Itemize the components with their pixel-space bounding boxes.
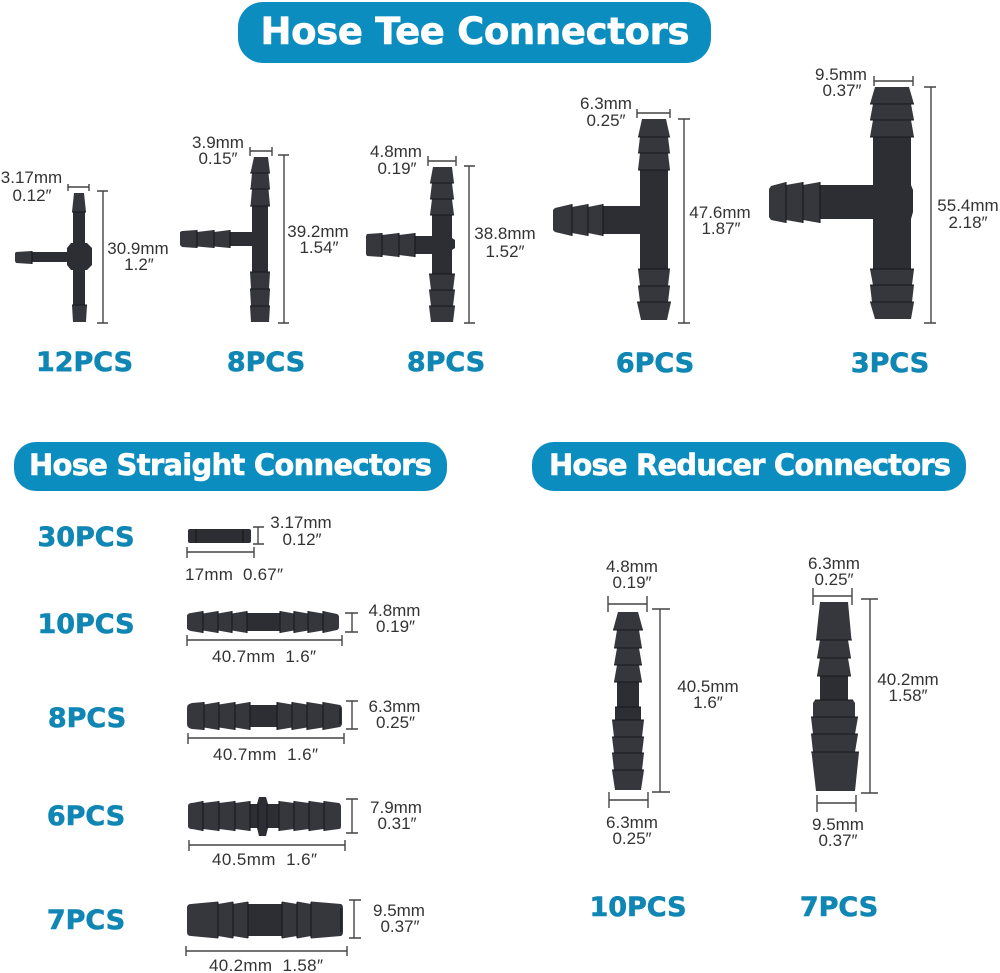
- quantity: 3PCS: [851, 348, 929, 379]
- dimensions: 0.25″: [586, 111, 626, 130]
- icon: 4.8mm straight: [187, 611, 339, 633]
- dimensions: 40.7mm 1.6″: [212, 647, 316, 666]
- dimensions: [187, 601, 420, 666]
- dimensions: 0.25″: [612, 829, 652, 848]
- dimensions: 0.37″: [380, 917, 420, 936]
- panel: 7PCS reducer connector: [800, 554, 939, 923]
- dimensions: 0.31″: [377, 814, 417, 833]
- icon: 3.17mm straight: [188, 529, 251, 543]
- dimensions: 1.6″: [693, 693, 723, 712]
- heading: Hose Straight Connectors: Hose Straight Connectors: [29, 448, 432, 482]
- dimensions: 0.19″: [376, 617, 415, 636]
- panel: 6PCS straight connector: [47, 797, 422, 869]
- icon: 9.5mm tee: [769, 87, 914, 319]
- panel: 8PCS tee connector 3.9mm: [180, 133, 349, 378]
- quantity: 8PCS: [227, 347, 305, 378]
- dimensions: 0.37″: [822, 81, 862, 100]
- dimensions: 6.3mm: [369, 697, 420, 716]
- dimensions: 17mm 0.67″: [185, 565, 283, 584]
- dimensions: 1.54″: [299, 238, 339, 257]
- dimensions: 30.9mm: [107, 239, 169, 258]
- panel: 12PCS tee connector: [1, 168, 169, 378]
- icon: 7.9mm straight: [188, 797, 341, 836]
- quantity: 7PCS: [800, 892, 878, 923]
- panel: 10PCS reducer connector: [589, 557, 739, 923]
- dimensions: [370, 142, 536, 323]
- dimensions: [189, 798, 422, 869]
- dimensions: [1, 168, 169, 323]
- dimensions: 9.5mm: [815, 65, 867, 84]
- heading: Hose Tee Connectors: [238, 2, 711, 63]
- dimensions: 0.25″: [376, 713, 415, 732]
- quantity: 10PCS: [589, 892, 687, 923]
- quantity: 7PCS: [47, 905, 125, 936]
- dimensions: 6.3mm: [606, 813, 658, 832]
- dimensions: 0.19″: [377, 159, 417, 178]
- dimensions: 4.8mm: [369, 601, 420, 620]
- panel: 30PCS straight connector: [37, 513, 332, 584]
- dimensions: 0.19″: [612, 573, 652, 592]
- dimensions: 6.3mm: [808, 554, 860, 573]
- dimensions: 9.5mm: [373, 901, 425, 920]
- dimensions: 38.8mm: [474, 224, 536, 243]
- dimensions: 55.4mm: [937, 196, 999, 215]
- dimensions: 7.9mm: [370, 798, 422, 817]
- dimensions: 0.25″: [814, 570, 854, 589]
- quantity: 8PCS: [407, 347, 485, 378]
- dimensions: 1.2″: [124, 255, 154, 274]
- icon: 4.8 to 6.3mm reducer: [612, 612, 645, 790]
- icon: 6.3 to 9.5mm reducer: [811, 602, 859, 791]
- icon: 3.9mm tee: [180, 157, 270, 322]
- dimensions: 4.8mm: [606, 557, 658, 576]
- dimensions: 47.6mm: [689, 203, 751, 222]
- icon: 6.3mm tee: [553, 119, 671, 320]
- panel: 10PCS straight connector: [37, 601, 420, 666]
- dimensions: 3.17mm: [270, 513, 332, 532]
- quantity: 6PCS: [47, 801, 125, 832]
- dimensions: [185, 513, 332, 584]
- panel: 8PCS straight connector: [48, 697, 420, 764]
- dimensions: 2.18″: [948, 213, 988, 232]
- panel: 3PCS tee connector: [769, 65, 999, 379]
- dimensions: [186, 900, 425, 973]
- heading: Hose Straight Connectors: [14, 442, 447, 491]
- dimensions: 0.12″: [12, 186, 52, 205]
- heading: Hose Tee Connectors: Hose Tee Connectors: [260, 10, 690, 53]
- icon: 4.8mm tee: [366, 167, 455, 322]
- dimensions: [808, 554, 939, 850]
- dimensions: 3.17mm: [1, 168, 62, 187]
- dimensions: [188, 697, 420, 764]
- dimensions: 39.2mm: [287, 222, 349, 241]
- quantity: 8PCS: [48, 703, 126, 734]
- dimensions: 40.2mm: [877, 670, 939, 689]
- panel: 7PCS straight connector: [47, 900, 425, 973]
- dimensions: [815, 65, 999, 323]
- dimensions: [606, 557, 739, 848]
- dimensions: [192, 133, 349, 323]
- quantity: 6PCS: [616, 348, 694, 379]
- dimensions: [580, 94, 751, 323]
- icon: 6.3mm straight: [187, 702, 342, 730]
- icon: 3.17mm tee: [15, 193, 92, 322]
- heading: Hose Reducer Connectors: Hose Reducer Connectors: [549, 448, 951, 482]
- dimensions: 40.5mm: [677, 677, 739, 696]
- dimensions: 1.87″: [701, 219, 741, 238]
- heading: Hose Reducer Connectors: [532, 442, 966, 491]
- dimensions: 0.15″: [198, 149, 238, 168]
- dimensions: 40.7mm 1.6″: [213, 745, 318, 764]
- dimensions: 0.37″: [818, 831, 858, 850]
- dimensions: 3.9mm: [192, 133, 244, 152]
- quantity: 12PCS: [36, 347, 133, 378]
- dimensions: 9.5mm: [812, 815, 864, 834]
- dimensions: 1.58″: [888, 686, 928, 705]
- quantity: 30PCS: [37, 522, 135, 553]
- dimensions: 6.3mm: [580, 94, 632, 113]
- icon: 9.5mm straight: [187, 901, 343, 939]
- panel: 8PCS tee connector 4.8mm: [366, 142, 536, 378]
- dimensions: 0.12″: [282, 530, 322, 549]
- dimensions: 1.52″: [485, 242, 525, 261]
- quantity: 10PCS: [37, 609, 135, 640]
- dimensions: 4.8mm: [370, 142, 422, 161]
- dimensions: 40.5mm 1.6″: [212, 850, 317, 869]
- panel: 6PCS tee connector: [553, 94, 751, 379]
